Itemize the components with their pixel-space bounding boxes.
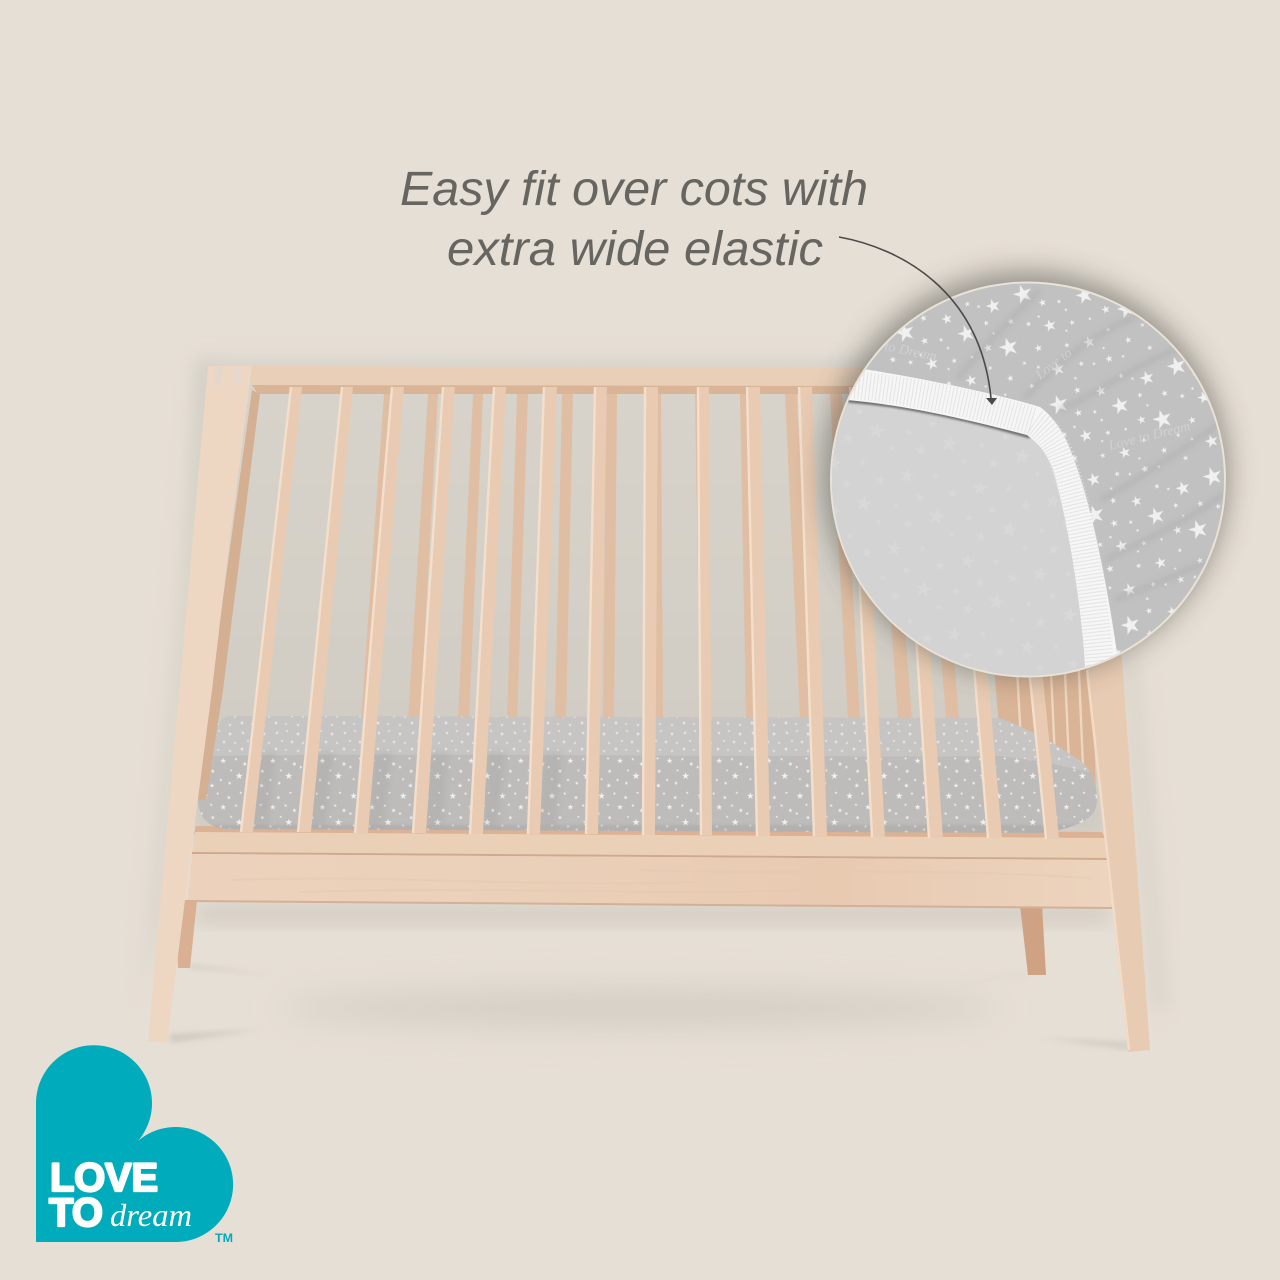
script on fabric: to Dream bbox=[883, 339, 938, 365]
fitted sheet on mattress bbox=[198, 716, 1097, 833]
logo: Love to Dream bbox=[36, 1045, 233, 1245]
top rail bbox=[252, 366, 880, 385]
magnified detail circle bbox=[820, 272, 1235, 700]
mattress ledge bbox=[194, 826, 1106, 840]
inner sheet bbox=[832, 400, 1085, 676]
caption bbox=[400, 163, 868, 276]
logo LOVE: LOVE bbox=[50, 1156, 158, 1200]
right post bbox=[1085, 640, 1150, 1052]
gathered folds bbox=[958, 290, 1230, 600]
left post bbox=[148, 366, 252, 1043]
caption line 2: extra wide elastic bbox=[447, 223, 823, 276]
front slats bbox=[240, 387, 1059, 839]
magnified fabric bbox=[832, 284, 1224, 676]
script on fabric bbox=[883, 339, 1192, 454]
back slats bbox=[361, 394, 960, 730]
bottom rails bbox=[187, 832, 1114, 909]
logo heart bbox=[36, 1045, 233, 1242]
script on fabric: Love to bbox=[1032, 346, 1075, 384]
circle rim bbox=[830, 282, 1226, 678]
arrow bbox=[839, 237, 997, 405]
left post side bbox=[195, 390, 260, 800]
right end slats bbox=[992, 640, 1096, 800]
slat highlights bbox=[241, 387, 1046, 839]
circle shadow bbox=[824, 272, 1228, 676]
crib bbox=[148, 366, 1150, 1052]
back legs bbox=[176, 900, 1046, 975]
back rail bbox=[252, 385, 870, 394]
logo TO: TO bbox=[49, 1191, 103, 1235]
logo trademark: TM bbox=[215, 1233, 233, 1245]
crib backdrop shade bbox=[140, 358, 1170, 1010]
logo dream: dream bbox=[110, 1197, 192, 1233]
floor shadow bbox=[170, 904, 1130, 1050]
caption line 1: Easy fit over cots with bbox=[400, 163, 868, 216]
elastic band bbox=[848, 369, 1117, 680]
script on fabric: Love to Dream bbox=[1106, 419, 1192, 454]
seam shadow bbox=[848, 401, 1030, 437]
